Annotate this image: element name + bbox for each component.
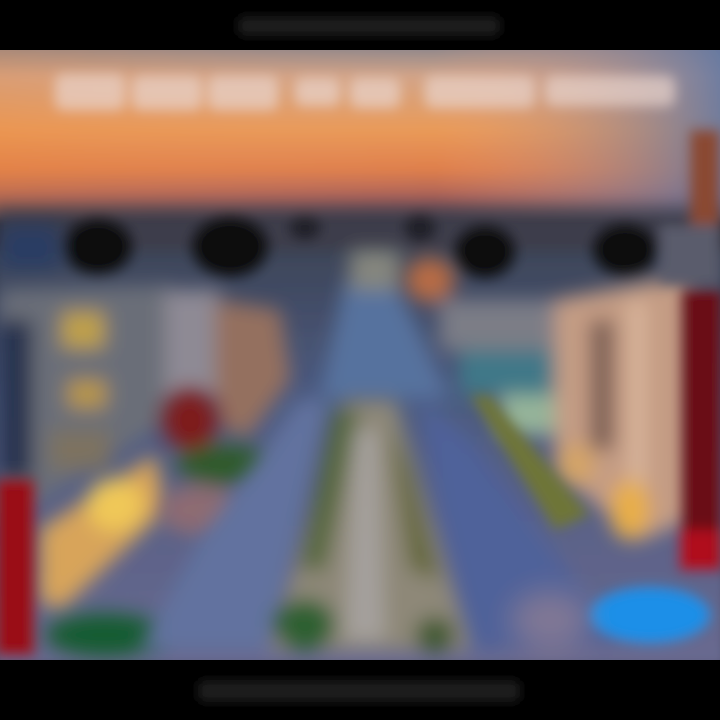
right buildings xyxy=(406,258,690,540)
left road xyxy=(140,400,330,650)
dark tree blobs xyxy=(64,214,657,278)
central median with trees xyxy=(270,400,470,653)
street base xyxy=(0,250,720,670)
horizon tree line xyxy=(0,208,720,268)
right hedge xyxy=(470,395,590,530)
caption text placeholder xyxy=(198,680,520,702)
pale plaza around pool xyxy=(510,590,590,650)
central distant road xyxy=(320,250,450,400)
blue pool xyxy=(590,587,710,643)
title bar text placeholder xyxy=(238,16,500,36)
left buildings xyxy=(0,225,290,520)
left glowing storefront xyxy=(40,455,165,610)
red awning and green hedge xyxy=(45,390,273,657)
red left column xyxy=(0,480,34,655)
right road xyxy=(420,400,620,650)
sunset sky xyxy=(0,40,720,220)
far right red tower xyxy=(660,130,720,570)
headline blurred over sky xyxy=(55,74,675,110)
